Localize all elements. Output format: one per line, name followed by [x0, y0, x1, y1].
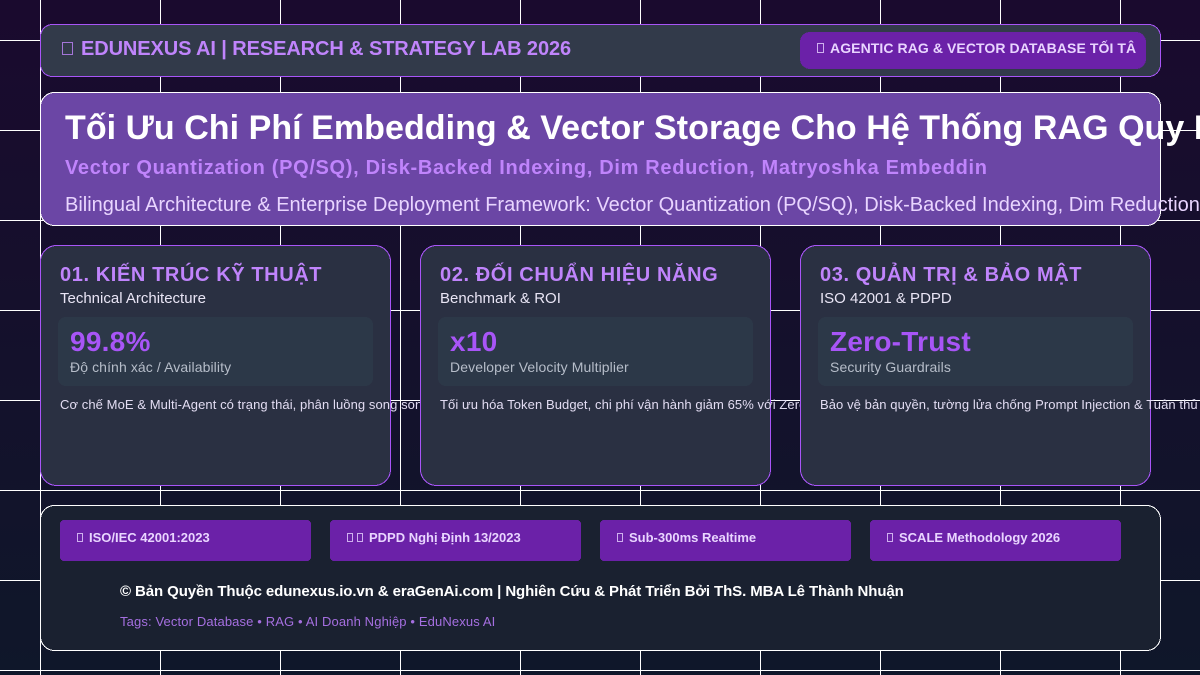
header badge: [800, 32, 1146, 69]
badge: SCALE: SCALE Methodology 2026: [899, 530, 1060, 545]
card body text: Cơ chế MoE & Multi-Agent có trạng thái, phân luồng song song: [60, 397, 430, 412]
badge: ISO: [60, 520, 311, 561]
subtitle: Vector Quantization (PQ/SQ), Disk-Backed Indexing, Dim Reduction, Matryoshka Embeddin: [65, 157, 988, 179]
badge: realtime: Sub-300ms Realtime: [629, 530, 756, 545]
copyright: © Bản Quyền Thuộc edunexus.io.vn & eraGenAi.com | Nghiên Cứu & Phát Triển Bởi ThS. MBA Lê Thành Nhuận: [120, 583, 904, 600]
badge: realtime: [600, 520, 851, 561]
card body text: Bảo vệ bản quyền, tường lửa chống Prompt Injection & Tuân thủ: [820, 397, 1198, 412]
card subheading: Benchmark & ROI: [440, 290, 561, 307]
badge: SCALE: [870, 520, 1121, 561]
metric box: [70, 326, 232, 375]
metric box: Zero-Trust: [830, 326, 971, 357]
metric box: [450, 326, 629, 375]
metric box: x10: [450, 326, 497, 357]
card subheading: Technical Architecture: [60, 290, 206, 307]
metric box: [830, 326, 971, 375]
metric box: Security Guardrails: [830, 359, 951, 375]
card body text: Tối ưu hóa Token Budget, chi phí vận hành giảm 65% với Zero: [440, 397, 806, 412]
panel: governance and security: [800, 245, 1198, 486]
tags: Tags: Vector Database • RAG • AI Doanh Nghiệp • EduNexus AI: [120, 614, 495, 629]
badge: ISO: ISO/IEC 42001:2023: [89, 530, 210, 545]
card heading: 02. ĐỐI CHUẨN HIỆU NĂNG: [440, 264, 718, 286]
header brand title: EDUNEXUS AI | RESEARCH & STRATEGY LAB 2026: [81, 38, 571, 60]
header badge: AGENTIC RAG & VECTOR DATABASE TỐI TÂ: [830, 40, 1136, 56]
card heading: 01. KIẾN TRÚC KỸ THUẬT: [60, 264, 322, 286]
badge: PDPD: [330, 520, 581, 561]
header bar: [40, 24, 1161, 77]
metric box: 99.8%: [70, 326, 151, 357]
hero title panel: [41, 92, 1200, 226]
panel: technical architecture: [40, 245, 430, 486]
panel: benchmark and ROI: [420, 245, 806, 486]
card heading: 03. QUẢN TRỊ & BẢO MẬT: [820, 264, 1082, 286]
card subheading: ISO 42001 & PDPD: [820, 290, 952, 307]
footer panel: [41, 505, 1161, 651]
metric box: Developer Velocity Multiplier: [450, 359, 629, 375]
badge: PDPD: PDPD Nghị Định 13/2023: [369, 530, 521, 545]
metric box: Độ chính xác / Availability: [70, 359, 231, 375]
